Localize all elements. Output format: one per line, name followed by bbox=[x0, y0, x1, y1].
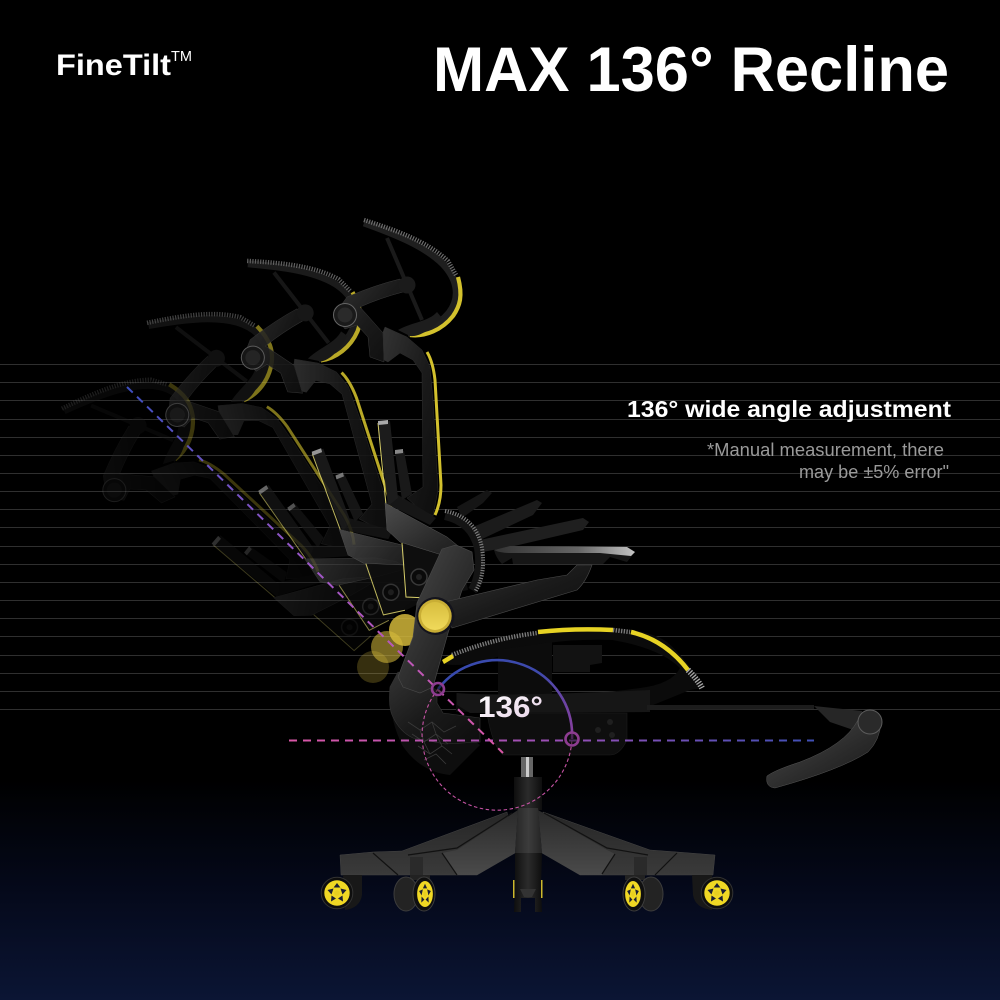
armrest pad bbox=[494, 546, 635, 564]
back mesh ribbed ring bbox=[445, 511, 483, 592]
gas cylinder bbox=[514, 757, 542, 810]
right inner face bbox=[538, 810, 615, 875]
chair: upright back bbox=[334, 220, 470, 598]
left outer arm bbox=[340, 812, 515, 875]
diagonal dashed axis bbox=[127, 387, 503, 753]
chair: ghost recline position 4 bbox=[40, 335, 401, 702]
side bracket bbox=[398, 545, 474, 693]
right outer arm bbox=[542, 812, 715, 875]
note: manual measurement: *Manual measurement, there bbox=[707, 440, 944, 460]
left inner face bbox=[442, 810, 518, 875]
seat pan and mechanism bbox=[457, 690, 650, 755]
lower back shell bbox=[389, 672, 480, 775]
marker: right bbox=[566, 732, 578, 746]
caster: far left bbox=[321, 875, 362, 910]
horizontal background lines bbox=[0, 364, 1000, 710]
angle label: 136° bbox=[478, 691, 543, 724]
ghost yellow knobs bbox=[357, 614, 421, 683]
caster: inner right bbox=[623, 875, 663, 911]
yellow recline knob bbox=[416, 597, 454, 635]
marker: upper bbox=[432, 683, 444, 695]
creases bbox=[373, 813, 677, 875]
trademark: TM bbox=[171, 48, 192, 65]
blue arc bbox=[438, 660, 572, 739]
lattice mesh bbox=[408, 722, 456, 764]
ghost armrests bbox=[457, 490, 589, 552]
caster: inner left bbox=[394, 875, 435, 911]
title: MAX 136 Recline: MAX 136° Recline bbox=[433, 35, 949, 105]
note: error margin: may be ±5% error" bbox=[799, 462, 949, 482]
front leg caster bbox=[513, 853, 542, 912]
five star base bbox=[340, 808, 715, 875]
horizontal dashed axis bbox=[289, 740, 814, 742]
chair: ghost recline position 3 bbox=[120, 271, 425, 667]
caster: far right bbox=[692, 875, 733, 910]
heading: wide angle adjustment: 136° wide angle adjustment bbox=[627, 396, 951, 422]
footrest bbox=[647, 705, 882, 788]
seat cushion bbox=[442, 628, 703, 712]
angle diagram bbox=[127, 387, 814, 810]
title: FineTilt: FineTilt bbox=[56, 49, 171, 82]
hub bbox=[515, 808, 542, 853]
chair: ghost recline position 2 bbox=[218, 234, 446, 634]
armrest support tube bbox=[445, 565, 592, 628]
dashed circle bbox=[422, 689, 572, 810]
